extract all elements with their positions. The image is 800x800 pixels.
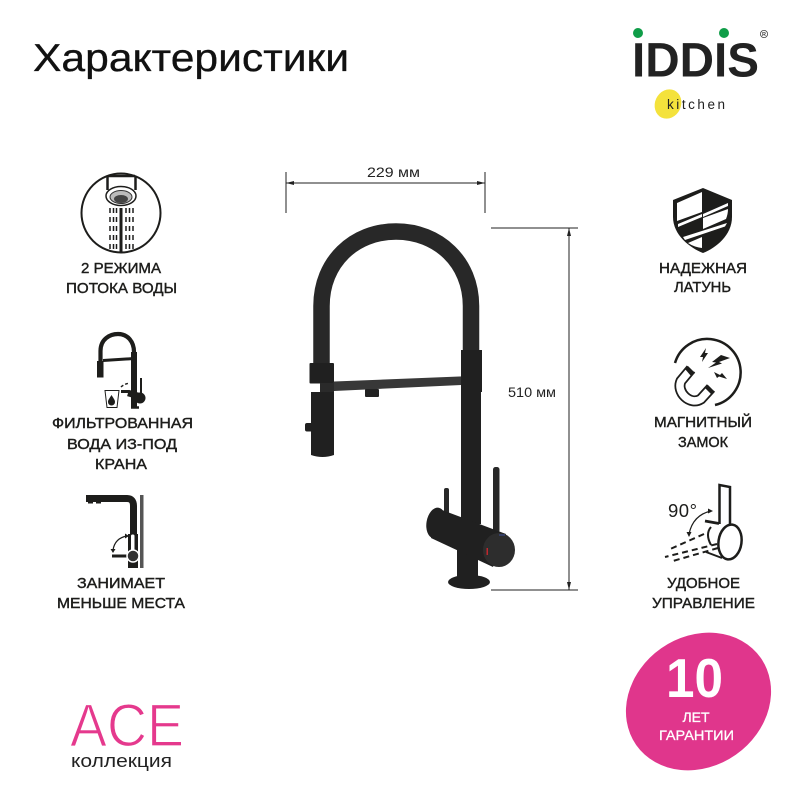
faucet column <box>461 350 482 524</box>
label: two flow modes <box>66 261 177 297</box>
logo: IDDIS kitchen: IDDIS <box>632 34 759 88</box>
faucet <box>305 232 515 589</box>
collection name: коллекция <box>71 751 172 771</box>
label: filtered water <box>52 416 193 473</box>
label: convenient control: УПРАВЛЕНИЕ <box>652 596 755 612</box>
faucet arch <box>322 232 471 366</box>
label: takes less space: ЗАНИМАЕТ <box>77 576 165 592</box>
width dimension: 229 мм <box>367 165 420 180</box>
faucet handles <box>444 467 500 533</box>
label: reliable brass: ЛАТУНЬ <box>674 280 731 296</box>
label: takes less space: МЕНЬШЕ МЕСТА <box>57 596 185 612</box>
icon: convenient control <box>665 485 744 561</box>
logo: IDDIS kitchen <box>632 28 768 123</box>
label: two flow modes: 2 РЕЖИМА <box>81 261 161 277</box>
height dimension <box>491 228 578 590</box>
label: filtered water: ФИЛЬТРОВАННАЯ <box>52 416 193 432</box>
faucet bar <box>334 376 472 391</box>
width dimension <box>286 165 485 213</box>
logo: IDDIS kitchen: R <box>762 32 766 38</box>
warranty badge: 10 <box>666 647 723 709</box>
icon: takes less space <box>86 495 144 568</box>
label: magnetic lock: МАГНИТНЫЙ <box>654 413 752 431</box>
label: reliable brass: НАДЕЖНАЯ <box>659 261 747 277</box>
label: convenient control: УДОБНОЕ <box>667 576 740 592</box>
warranty badge: ГАРАНТИИ <box>659 727 734 743</box>
collection name: ACE <box>70 692 184 759</box>
icon: convenient control: 90° <box>668 500 697 521</box>
label: filtered water: ВОДА ИЗ-ПОД <box>67 437 177 453</box>
warranty badge <box>599 605 798 798</box>
label: convenient control <box>652 576 755 612</box>
height dimension: 510 мм <box>508 385 556 400</box>
faucet body <box>424 506 515 567</box>
title: Характеристики <box>33 37 349 80</box>
label: reliable brass <box>659 261 747 296</box>
label: magnetic lock <box>654 413 752 451</box>
icon: two flow modes <box>82 174 160 252</box>
faucet base <box>448 540 490 589</box>
icon: magnetic lock <box>675 339 741 405</box>
warranty badge: ЛЕТ <box>682 709 710 725</box>
faucet spray head <box>305 363 334 457</box>
label: magnetic lock: ЗАМОК <box>678 435 729 451</box>
label: two flow modes: ПОТОКА ВОДЫ <box>66 281 177 297</box>
label: filtered water: КРАНА <box>95 457 147 473</box>
icon: reliable brass shield <box>673 188 732 253</box>
label: takes less space <box>57 576 185 612</box>
logo: IDDIS kitchen: kitchen <box>667 97 725 112</box>
icon: filtered water faucet <box>97 334 146 408</box>
